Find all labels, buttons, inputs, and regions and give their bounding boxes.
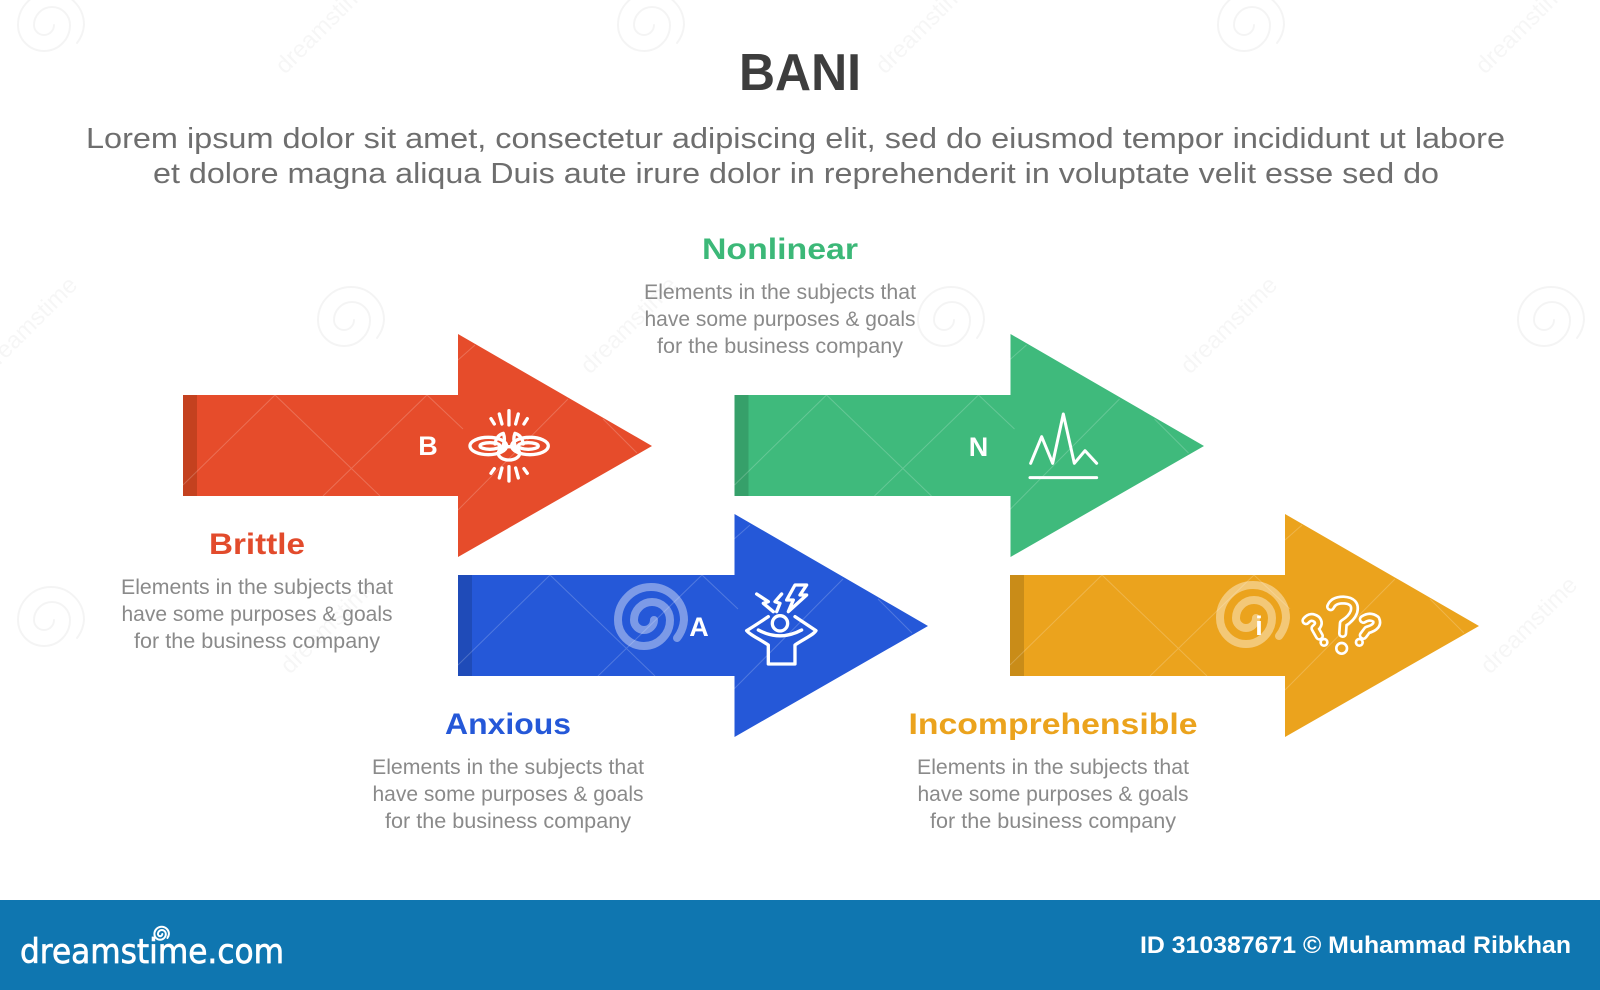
heading: Nonlinear: Nonlinear (702, 233, 858, 266)
arrow: Nonlinear (734, 334, 1204, 557)
text block: Brittle (121, 576, 393, 653)
text block: Brittle: for the business company (134, 630, 381, 653)
text block: Incomprehensible (917, 756, 1189, 833)
heading: Brittle: Brittle (209, 528, 305, 561)
text block: Anxious: have some purposes & goals (372, 783, 644, 806)
text block: Incomprehensible: have some purposes & goals (918, 783, 1188, 806)
icon: anxious person (747, 585, 816, 664)
text block: Anxious (372, 756, 644, 833)
text block: Nonlinear (644, 281, 916, 358)
background watermark spirals and text: dreamstime (1175, 271, 1283, 379)
image id and credit: ID 310387671 © Muhammad Ribkhan (1140, 932, 1571, 959)
text block: Brittle: Elements in the subjects that (121, 576, 393, 599)
background watermark spirals and text: dreamstime (275, 571, 383, 679)
arrow: Incomprehensible (1010, 514, 1479, 737)
text block: Incomprehensible: for the business company (930, 810, 1177, 833)
heading: Incomprehensible: Incomprehensible (908, 708, 1198, 741)
footer band (0, 900, 1600, 990)
arrow: Brittle: B (418, 431, 438, 461)
text block: Incomprehensible: Elements in the subjects that (917, 756, 1189, 779)
arrow: Anxious: A (689, 612, 709, 642)
background watermark spirals and text (0, 0, 1584, 679)
background watermark spirals and text: dreamstime (1475, 571, 1583, 679)
text block: Nonlinear: Elements in the subjects that (644, 281, 916, 304)
subtitle text (86, 123, 1505, 190)
text block: Brittle: have some purposes & goals (122, 603, 392, 626)
text block: Nonlinear: for the business company (657, 335, 904, 358)
logo spiral (154, 927, 169, 940)
text block: Anxious: for the business company (385, 810, 632, 833)
text block: Nonlinear: have some purposes & goals (644, 308, 916, 331)
subtitle text: Lorem ipsum dolor sit amet, consectetur adipiscing elit, sed do eiusmod tempor incididunt ut labore (86, 123, 1505, 155)
icon: question marks (1306, 600, 1377, 654)
logo text: dreamstime.com (20, 932, 284, 972)
text block: Anxious: Elements in the subjects that (372, 756, 644, 779)
arrow: Brittle (183, 334, 652, 557)
background watermark spirals and text: dreamstime (575, 271, 683, 379)
arrow: Nonlinear: N (969, 432, 988, 462)
arrow: Anxious (458, 514, 928, 737)
title: BANI (739, 44, 861, 102)
heading: Anxious: Anxious (445, 708, 571, 741)
subtitle text: et dolore magna aliqua Duis aute irure dolor in reprehenderit in voluptate velit esse sed do (153, 158, 1439, 190)
arrow: Incomprehensible: i (1255, 611, 1263, 641)
icon: nonlinear chart (1030, 414, 1097, 478)
icon: broken chain (470, 411, 548, 481)
